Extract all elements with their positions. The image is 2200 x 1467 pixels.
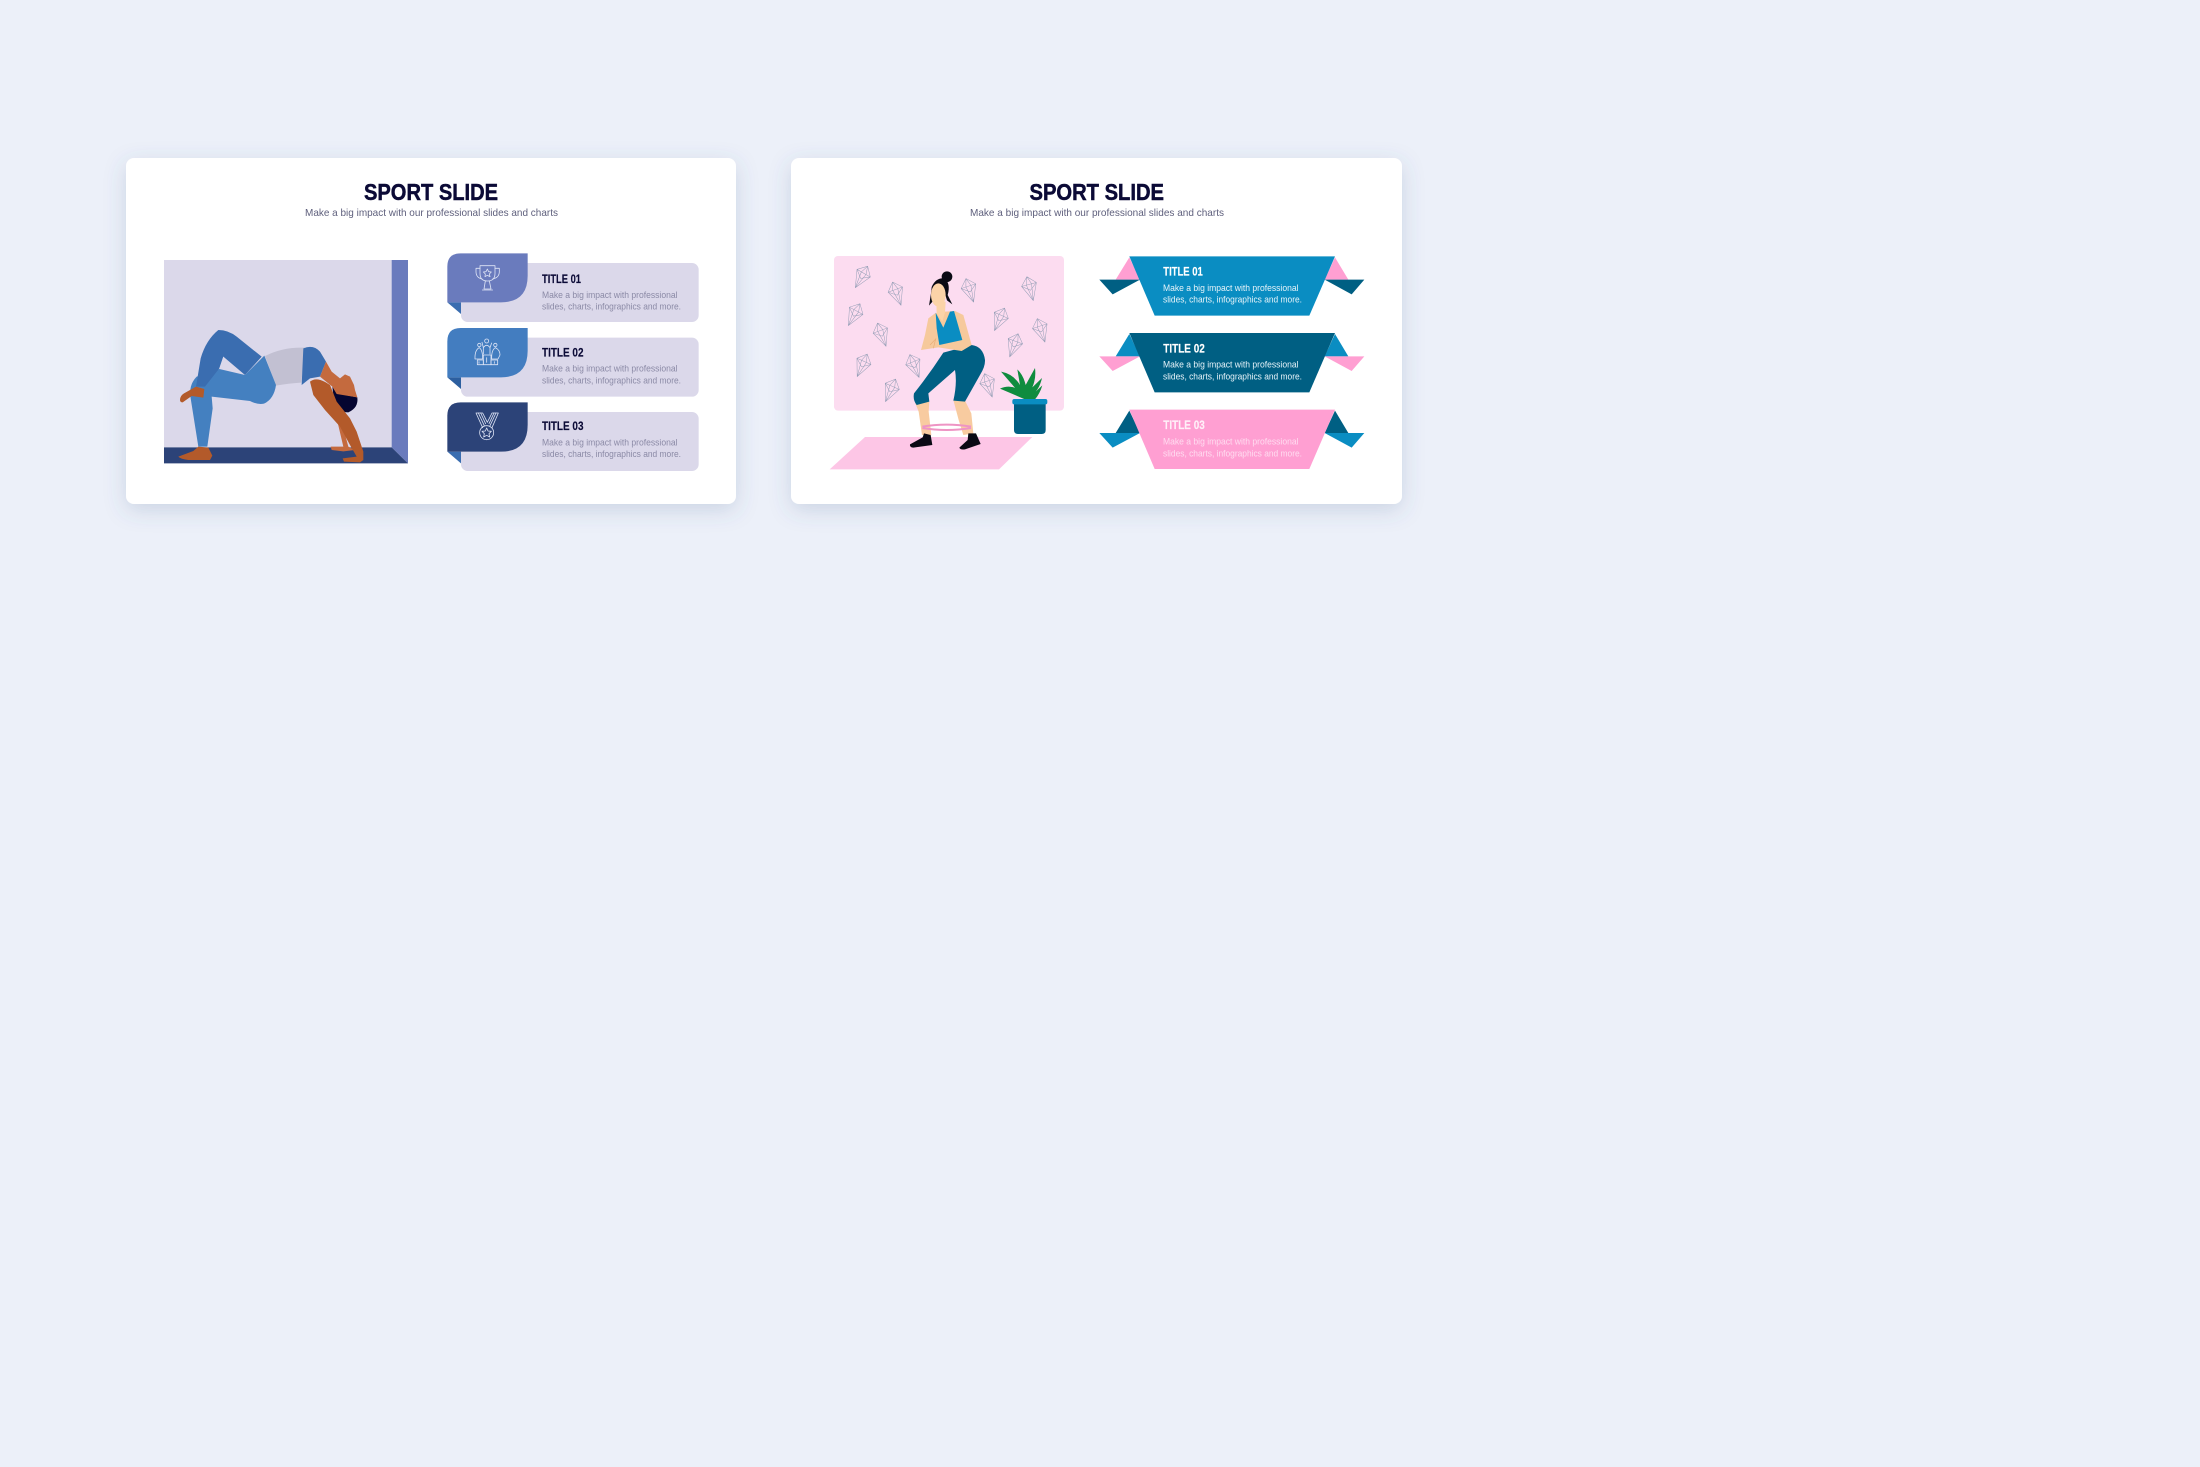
ribbon 01 text: TITLE 01 xyxy=(1163,267,1203,279)
plant xyxy=(1000,368,1042,399)
item 02 text: slides, charts, infographics and more. xyxy=(542,374,681,385)
ribbon 01 text xyxy=(1163,267,1302,305)
illustration: squat with resistance band xyxy=(830,256,1064,469)
item 01 text xyxy=(542,274,681,312)
ribbon 02 text: slides, charts, infographics and more. xyxy=(1163,370,1302,381)
ribbon 01 text: slides, charts, infographics and more. xyxy=(1163,294,1302,305)
item 02 text: TITLE 02 xyxy=(542,347,584,359)
back hand xyxy=(331,418,355,451)
item 03 text: TITLE 03 xyxy=(542,421,584,433)
face xyxy=(931,283,946,307)
ribbon 01 tails xyxy=(1099,280,1364,294)
ribbon 03 xyxy=(1099,410,1364,469)
title: SPORT SLIDE xyxy=(1030,179,1164,205)
calves xyxy=(915,400,973,435)
arms and torso xyxy=(921,311,972,351)
item 03 text xyxy=(542,421,681,459)
ribbon 02 xyxy=(1099,333,1364,392)
planted foot xyxy=(178,447,212,460)
item 02 fold xyxy=(447,377,461,389)
legs xyxy=(178,330,276,460)
ribbon 02 tails xyxy=(1099,356,1364,371)
title: SPORT SLIDE xyxy=(364,179,498,205)
item 01 background xyxy=(461,263,699,322)
item 03 tab xyxy=(447,402,528,452)
side wall xyxy=(392,260,408,463)
neck and head xyxy=(320,362,357,397)
item 03 fold xyxy=(447,452,461,463)
ribbon 03 text: slides, charts, infographics and more. xyxy=(1163,447,1302,458)
panel: sport slide right xyxy=(791,158,1402,504)
pot xyxy=(1014,403,1046,434)
item 02 tab xyxy=(447,328,528,377)
hair xyxy=(328,387,357,414)
item 03 text: Make a big impact with professional xyxy=(542,436,678,447)
shoes xyxy=(910,433,981,449)
item 01 text: Make a big impact with professional xyxy=(542,289,678,300)
raised foot xyxy=(180,387,204,402)
card background xyxy=(126,158,736,504)
ribbon 03 text: TITLE 03 xyxy=(1163,420,1205,432)
subtitle: Make a big impact with our professional slides and charts xyxy=(970,207,1224,219)
ribbon 01 body xyxy=(1129,256,1335,316)
lower body xyxy=(910,345,985,449)
raised thigh xyxy=(196,330,262,387)
panel: sport slide left xyxy=(126,158,736,504)
item 01 fold xyxy=(447,302,461,314)
icon: podium with people xyxy=(475,339,500,365)
item 02 xyxy=(447,328,699,397)
crop top xyxy=(265,348,305,386)
ribbon 02 text xyxy=(1163,343,1302,381)
ribbon 03 text: Make a big impact with professional xyxy=(1163,436,1298,447)
item 01 text: TITLE 01 xyxy=(542,274,581,286)
icon: medal xyxy=(476,413,498,440)
tank top xyxy=(936,311,962,345)
info list xyxy=(447,253,699,471)
item icons xyxy=(475,266,500,440)
item 02 background xyxy=(461,338,699,397)
ribbon 01 text: Make a big impact with professional xyxy=(1163,282,1298,293)
front arm xyxy=(310,379,363,462)
ribbon 03 text xyxy=(1163,420,1302,458)
neck xyxy=(936,302,946,322)
sports bra xyxy=(302,347,326,385)
ribbon 02 text: TITLE 02 xyxy=(1163,343,1205,355)
pot rim xyxy=(1012,399,1047,404)
item 01 xyxy=(447,253,699,322)
item 01 tab xyxy=(447,253,528,302)
upper body xyxy=(302,347,363,462)
illustration: backbend yoga pose xyxy=(164,260,408,463)
resistance band xyxy=(922,425,971,430)
item 01 text: slides, charts, infographics and more. xyxy=(542,301,681,312)
ribbon 01 folds xyxy=(1116,257,1348,280)
ribbon 01 xyxy=(1099,256,1364,316)
ribbon 02 body xyxy=(1129,333,1335,392)
item 03 background xyxy=(461,412,699,471)
leggings xyxy=(914,345,985,405)
ribbon 02 text: Make a big impact with professional xyxy=(1163,359,1298,370)
card background xyxy=(791,158,1402,504)
item 02 text: Make a big impact with professional xyxy=(542,363,678,374)
item 03 xyxy=(447,402,699,471)
ribbon list xyxy=(1099,256,1364,469)
ribbon 03 body xyxy=(1129,410,1335,469)
icon: trophy xyxy=(476,266,499,290)
hair xyxy=(929,278,952,306)
knee gap xyxy=(219,357,235,371)
ribbon 03 tails xyxy=(1099,433,1364,448)
room wall xyxy=(164,260,392,447)
item 02 text xyxy=(542,347,681,385)
yoga mat xyxy=(830,437,1032,469)
hair bun xyxy=(942,271,952,282)
item 03 text: slides, charts, infographics and more. xyxy=(542,448,681,459)
hand line xyxy=(930,339,936,348)
ribbon 02 folds xyxy=(1116,334,1348,356)
wall diamonds xyxy=(842,262,1052,405)
floor xyxy=(164,447,408,463)
ribbon 03 folds xyxy=(1116,411,1348,433)
upper body xyxy=(921,271,972,351)
standing leg and hip xyxy=(190,356,276,447)
pink wall xyxy=(834,256,1064,411)
subtitle: Make a big impact with our professional slides and charts xyxy=(305,207,558,219)
